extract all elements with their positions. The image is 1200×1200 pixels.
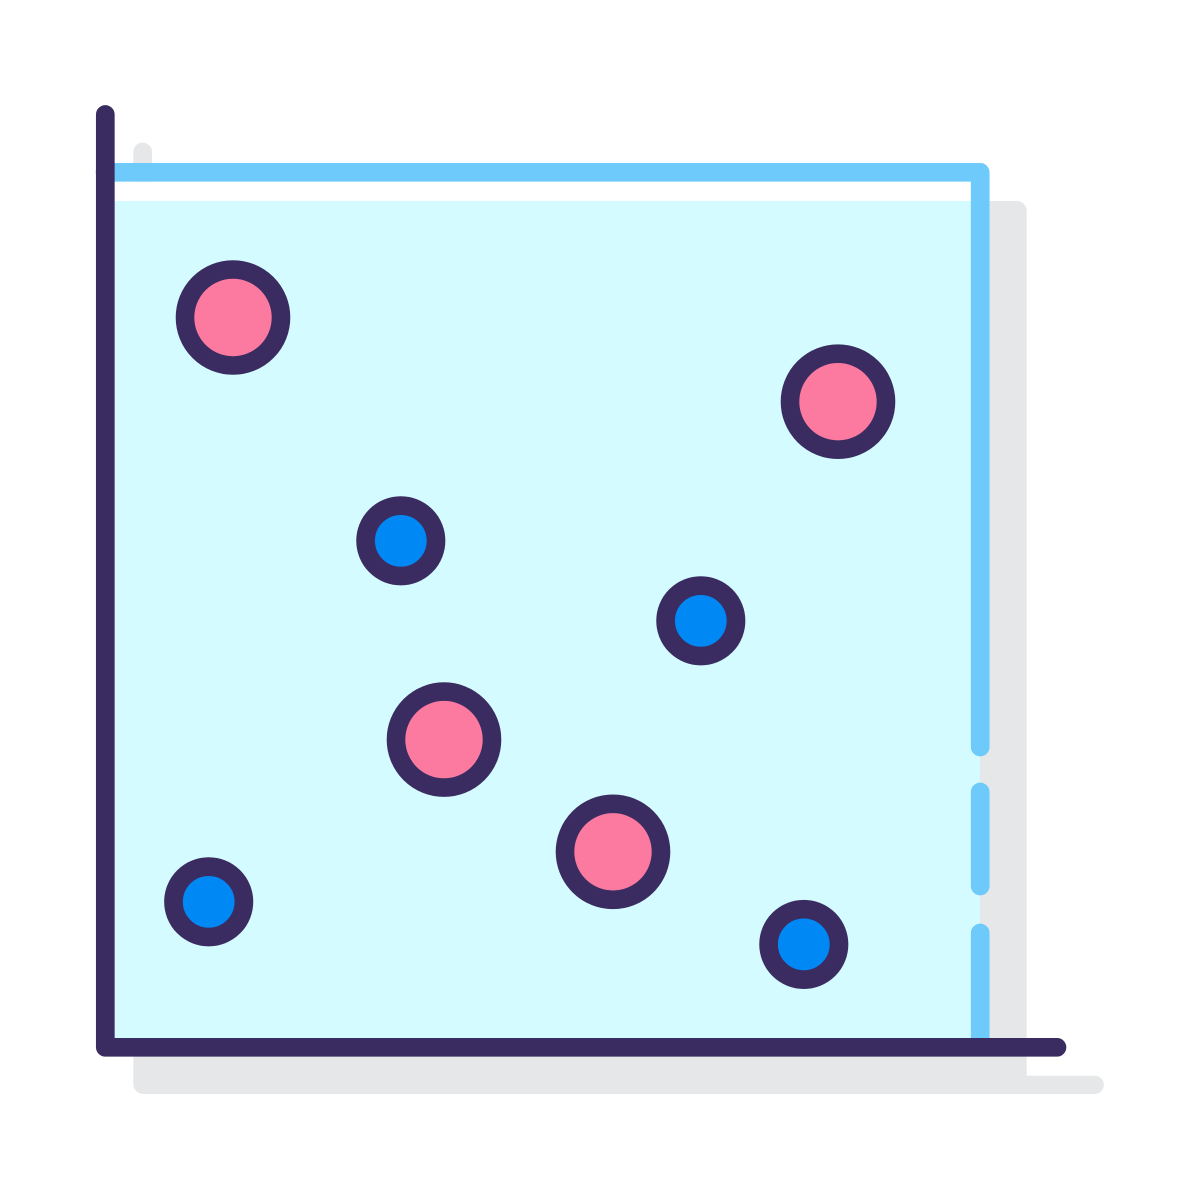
axes: [105, 114, 1057, 1047]
plot area background: [105, 201, 980, 1047]
white top band: [105, 182, 971, 201]
drop shadow: [133, 143, 1104, 1094]
pink data points: [185, 270, 886, 900]
blue data points: [174, 506, 839, 980]
light blue frame: [105, 172, 980, 1047]
